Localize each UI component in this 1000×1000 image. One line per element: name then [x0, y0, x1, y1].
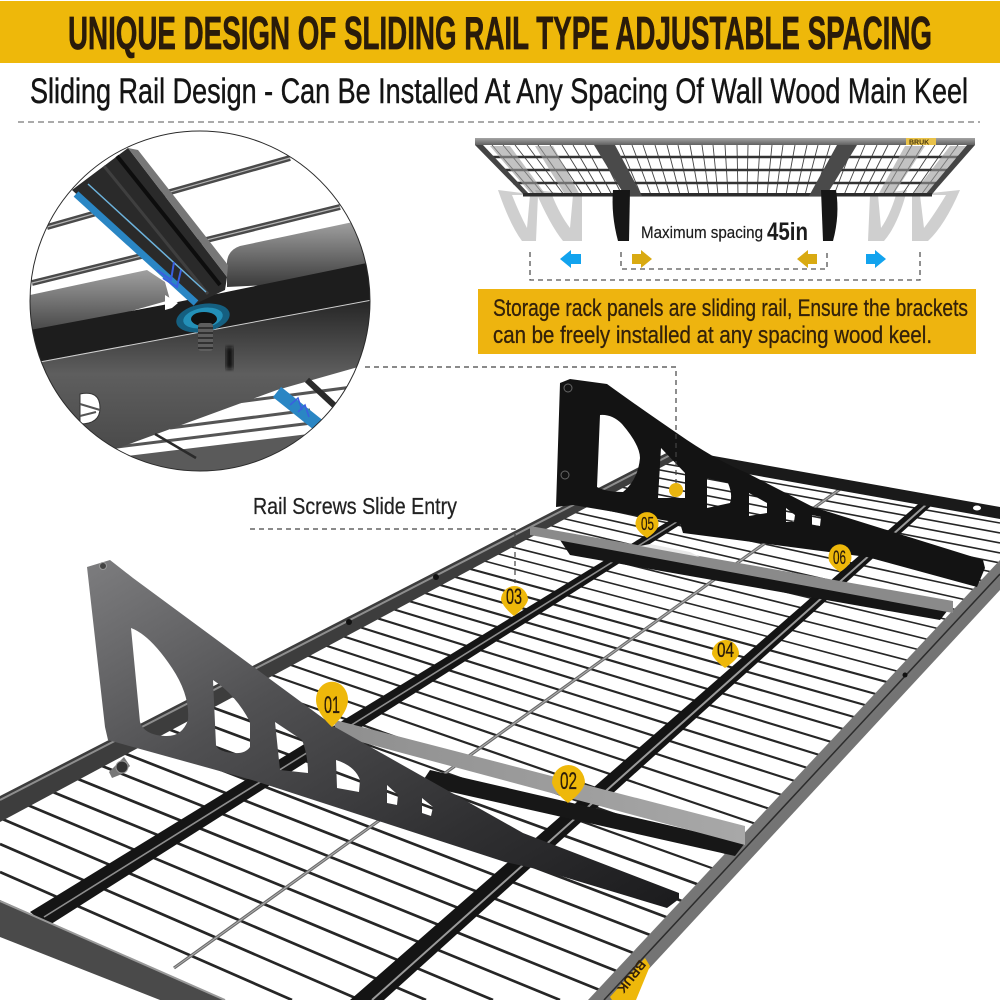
mesh panel: [480, 145, 970, 195]
marker 05: [636, 512, 658, 538]
ghost brackets: [498, 190, 960, 241]
stringer channel left: [30, 514, 686, 926]
sliding channel: [72, 148, 228, 304]
brand tag: BRUK: [909, 140, 929, 146]
mesh wires: [32, 158, 360, 447]
rear support bar: [530, 526, 953, 620]
sliding direction chevrons: [157, 262, 181, 287]
marker 04: 04: [717, 639, 734, 662]
callout: sliding rail note: can be freely installed at any spacing wood keel.: [493, 322, 932, 349]
label: maximum spacing: Maximum spacing: [641, 223, 763, 242]
marker 01: [316, 682, 348, 727]
callout: sliding rail note: [478, 289, 976, 354]
left side rail: [0, 446, 686, 822]
right side rail: [588, 560, 1000, 1000]
slot opening: [165, 295, 178, 310]
marker 05: 05: [641, 514, 654, 534]
center rod: [174, 487, 843, 968]
marker 06: [828, 544, 852, 572]
marker 02: [552, 765, 585, 803]
panel: main rack render: [0, 379, 1000, 1000]
rear bracket screws: [561, 384, 572, 479]
marker 01: 01: [324, 692, 340, 719]
back rail: [680, 450, 1000, 519]
brand tag: [906, 138, 936, 146]
label: rail screws slide entry: Rail Screws Slide Entry: [253, 493, 457, 519]
front rail: [0, 900, 225, 1000]
marker 04: [712, 639, 739, 668]
dashed leader to slide entry: [365, 367, 676, 486]
arrow: outer right blue: [866, 250, 886, 268]
ghost support bars: [490, 146, 966, 195]
panel: front view of rack with bracket spacing: [475, 138, 975, 241]
label: maximum spacing: 45in: [767, 218, 808, 246]
plate hole: [80, 393, 100, 424]
dark brackets: [613, 190, 630, 241]
arrow: inner left yellow: [797, 250, 817, 268]
marker 03: [501, 584, 528, 616]
front support bar: [335, 720, 745, 856]
label: maximum spacing: [641, 218, 808, 246]
arrow: outer left blue: [560, 250, 581, 268]
front wall bracket: [87, 560, 679, 908]
brand tag on rail: BRUK: [614, 957, 649, 997]
mesh wires: [0, 457, 1000, 1000]
front bracket screw: [100, 562, 106, 570]
marker 06: 06: [833, 548, 846, 569]
marker 03: 03: [506, 584, 522, 609]
washer and screw: [174, 300, 233, 369]
dark channel band: [30, 262, 372, 362]
rack frame: [475, 138, 975, 145]
bracket flanges: [30, 270, 170, 330]
dark support bars: [594, 145, 642, 196]
marker 02: 02: [560, 768, 577, 795]
arrow: inner right yellow: [632, 250, 652, 268]
lower flange: [130, 434, 304, 470]
rear wall bracket: [556, 379, 985, 587]
marker: yellow dot: [669, 483, 683, 497]
panel: circular detail of rail screw: [30, 131, 372, 471]
mounting screw: [109, 757, 130, 778]
stringer channel right: [350, 499, 931, 1000]
bracket plate: [36, 298, 372, 450]
lower channel: [277, 392, 322, 428]
